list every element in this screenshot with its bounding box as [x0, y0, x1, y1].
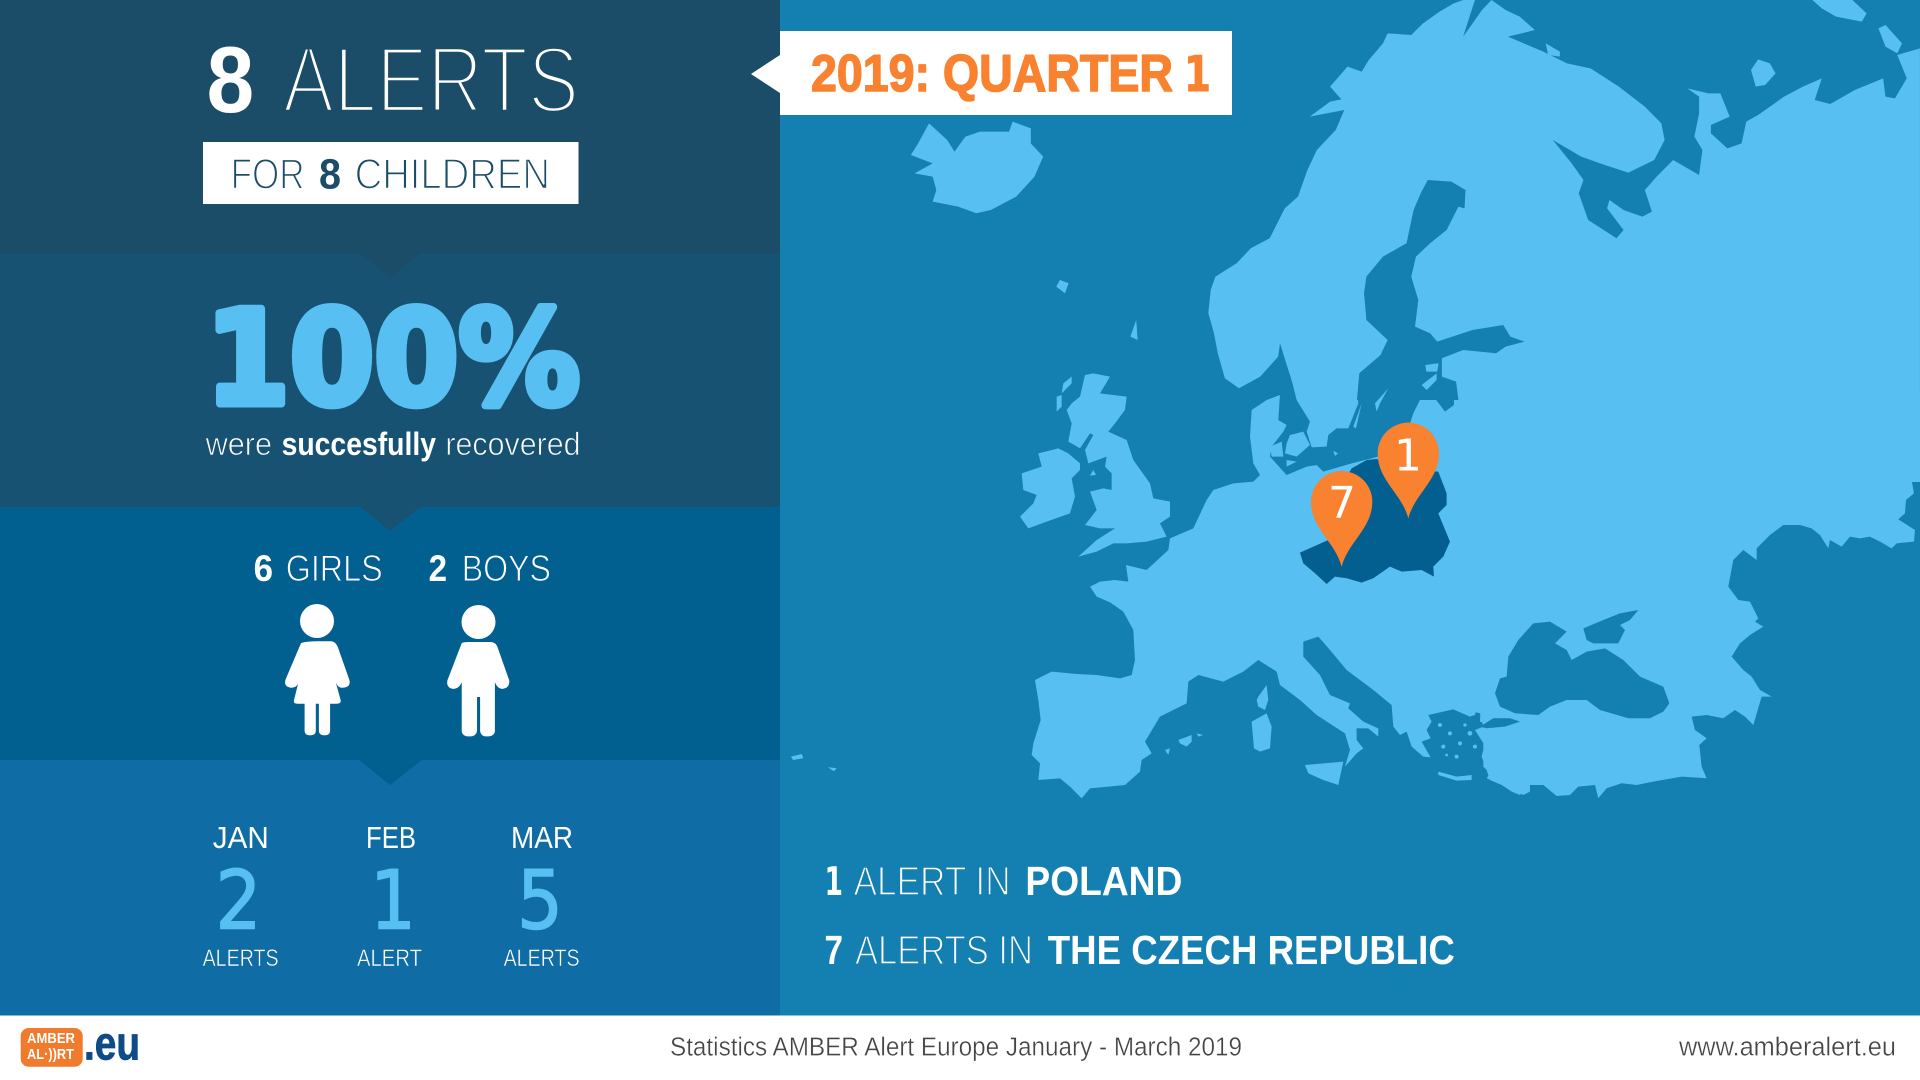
text: alerts by country — [824, 858, 1455, 973]
map pin: Czech Republic — [1311, 471, 1372, 567]
source line: Statistics AMBER Alert Europe January - March 2019 — [670, 1034, 1242, 1062]
website: www.amberalert.eu — [1678, 1034, 1896, 1062]
caption: recovered: succesfully — [282, 426, 436, 462]
text: alerts by country: THE CZECH REPUBLIC — [1048, 927, 1455, 973]
text: alerts by country: 1 — [824, 860, 843, 905]
column: February: 1 — [370, 854, 416, 948]
column: January: JAN — [213, 820, 269, 855]
logo: AMBER ALERT .eu: AMBER — [27, 1030, 75, 1047]
column: February: FEB — [366, 820, 416, 855]
label: for 8 children: 8 — [319, 151, 341, 199]
column: January: ALERTS — [203, 945, 279, 972]
label: 6 girls: 6 — [254, 547, 273, 589]
logo: AMBER ALERT .eu: .eu — [84, 1016, 140, 1069]
column: March: ALERTS — [504, 945, 580, 972]
logo: AMBER ALERT .eu: AL·))RT — [27, 1046, 74, 1063]
column: March: MAR — [511, 820, 573, 855]
map: land masses — [1032, 0, 1920, 798]
text: alerts by country: ALERT IN — [854, 858, 1011, 904]
label: for 8 children: FOR — [231, 151, 305, 199]
heading: 8 alerts — [207, 27, 579, 132]
caption: recovered: recovered — [445, 426, 581, 462]
caption: recovered: were — [205, 426, 272, 462]
caption: recovered — [205, 426, 581, 462]
map pin: Poland: 1 — [1394, 430, 1422, 482]
heading: 8 alerts: ALERTS — [283, 27, 579, 132]
column: March: 5 — [517, 854, 563, 948]
arrow: panel connector — [360, 507, 421, 531]
column: January — [203, 820, 279, 972]
column: March — [504, 820, 580, 972]
label: 2 boys: 2 — [429, 547, 447, 589]
logo: AMBER ALERT .eu — [21, 1016, 140, 1069]
statistic: 100%: 100% — [206, 282, 580, 434]
footer — [0, 1016, 1920, 1080]
label: 6 girls — [254, 547, 383, 589]
label: 6 girls: GIRLS — [286, 547, 383, 589]
highlighted countries: Poland and Czech Republic — [1300, 459, 1450, 584]
label: 2 boys: BOYS — [462, 547, 551, 589]
map pin: Czech Republic: 7 — [1328, 478, 1356, 529]
icon: boy — [447, 605, 509, 736]
panel: recovery rate — [0, 253, 780, 507]
panel: map of Europe — [780, 0, 1920, 1016]
panel: total alerts — [0, 0, 780, 253]
heading: 8 alerts: 8 — [207, 27, 254, 132]
text: alerts by country: ALERTS IN — [855, 927, 1033, 973]
label: for 8 children: CHILDREN — [355, 151, 550, 199]
map pin: Poland — [1378, 423, 1439, 518]
label: for 8 children — [203, 142, 578, 204]
callout: 2019 quarter 1: 1 — [1184, 46, 1211, 103]
text: alerts by country: 7 — [824, 927, 843, 973]
column: January: 2 — [216, 854, 262, 948]
label: 2 boys — [429, 547, 551, 589]
icon: girl — [285, 604, 350, 735]
map: islands — [791, 0, 1902, 785]
callout: 2019 quarter 1 — [751, 31, 1232, 115]
arrow: panel connector — [360, 253, 421, 277]
arrow: panel connector — [359, 760, 422, 785]
panel: alerts per month — [0, 760, 780, 1016]
column: February: ALERT — [357, 945, 422, 972]
panel: girls and boys — [0, 507, 780, 760]
column: February — [357, 820, 422, 972]
text: alerts by country: POLAND — [1025, 858, 1182, 904]
callout: 2019 quarter 1: 2019: QUARTER — [811, 45, 1173, 103]
map: inland seas — [1357, 180, 1669, 728]
